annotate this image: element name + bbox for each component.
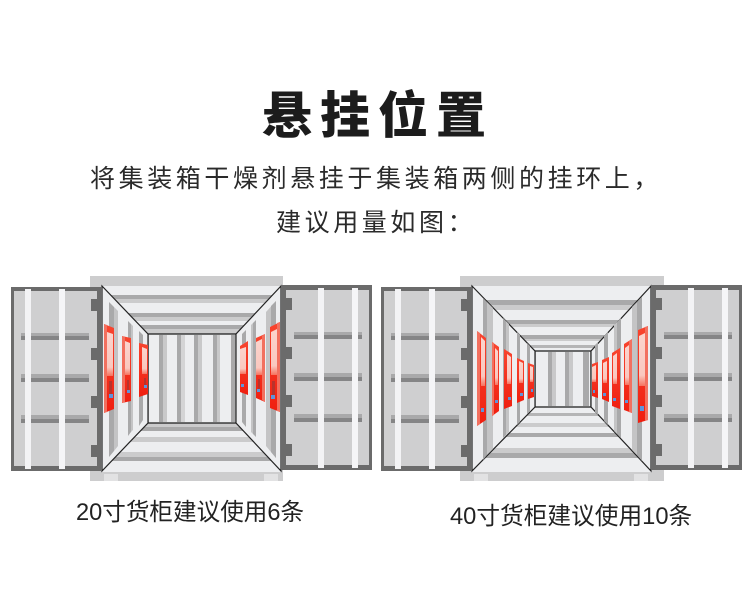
container 1 shell	[90, 276, 283, 481]
door: container 2 right	[651, 285, 742, 470]
container 1 back wall	[148, 334, 236, 423]
container 2: 40ft	[381, 276, 742, 481]
description line 2: 建议用量如图：	[276, 209, 476, 237]
description line 1: 将集装箱干燥剂悬挂于集装箱两侧的挂环上，	[90, 165, 662, 193]
container 2 right wall	[591, 286, 651, 471]
container 1 left wall	[102, 286, 148, 471]
caption: 40ft container: 40寸货柜建议使用10条	[450, 504, 692, 530]
desiccant strips: container 1 left wall	[104, 324, 148, 413]
title: 悬挂位置	[262, 88, 494, 144]
container 1 right wall	[236, 286, 281, 471]
door: container 1 right	[281, 285, 372, 470]
caption: 20ft container: 20寸货柜建议使用6条	[76, 500, 304, 526]
container 1: 20ft	[11, 276, 372, 481]
desiccant strips: container 1 right wall	[240, 322, 280, 412]
door: container 2 left	[381, 287, 472, 471]
container 2 left wall	[472, 286, 535, 471]
desiccant strips: container 2 right wall	[592, 326, 648, 423]
container 2 shell	[460, 276, 664, 481]
container 2 back wall	[535, 351, 591, 407]
door: container 1 left	[11, 287, 102, 471]
desiccant strips: container 2 left wall	[477, 331, 534, 426]
